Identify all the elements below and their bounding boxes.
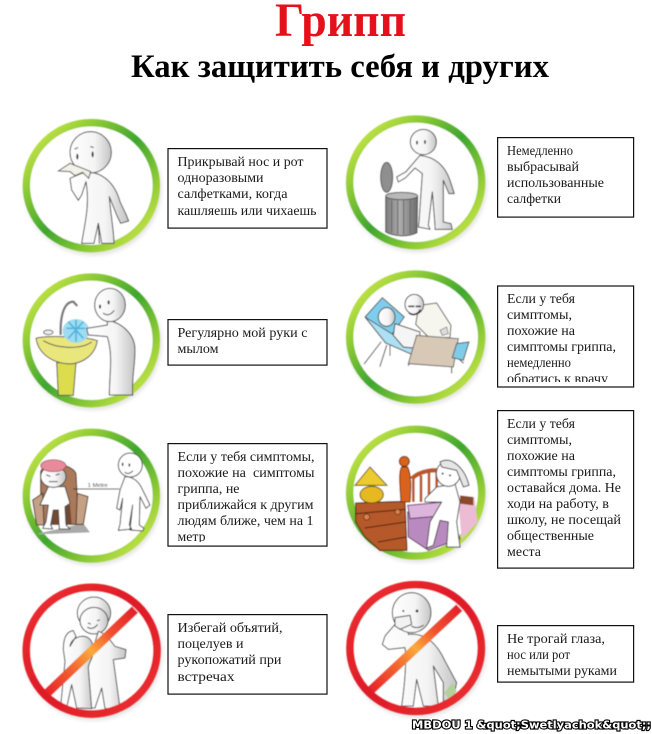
icon: sick person one metre away	[26, 432, 158, 562]
text box: throw away tissues: выбрасывай	[507, 160, 580, 175]
text box: stay at home: симптомы гриппа,	[507, 465, 616, 480]
text box: see a doctor: немедленно	[507, 356, 571, 371]
text box: see a doctor: симптомы гриппа,	[507, 340, 616, 355]
text box: keep distance: Если у тебя симптомы,	[178, 450, 314, 465]
text box: see a doctor: похожие на	[507, 324, 576, 339]
text box: avoid hugs	[168, 615, 327, 694]
text box: see a doctor: Если у тебя	[507, 292, 576, 307]
text box: throw away tissues: салфетки	[507, 192, 561, 207]
text box: keep distance: приближайся к другим	[178, 498, 314, 513]
text box: cover nose: Прикрывай нос и рот	[178, 155, 304, 170]
text box: do not touch face: нос или рот	[507, 648, 570, 663]
text box: keep distance: метр	[178, 530, 206, 545]
text box: cover nose	[168, 149, 327, 228]
text box: see a doctor: обратись к врачу	[507, 372, 608, 387]
icon: washing hands	[26, 277, 158, 406]
icon: prohibited hugging	[26, 587, 158, 717]
text box: throw away tissues	[498, 138, 634, 217]
text box: throw away tissues: Немедленно	[507, 144, 573, 159]
text box: stay at home: Если у тебя	[507, 417, 576, 432]
text box: wash hands: Регулярно мой руки с	[178, 326, 308, 341]
text box: cover nose: салфетками, когда	[178, 187, 288, 202]
text box: keep distance: гриппа, не	[178, 482, 240, 497]
text box: stay at home: ходи на работу, в	[507, 497, 609, 512]
text box: stay at home: школу, не посещай	[507, 513, 622, 528]
icon: prohibited touching face	[350, 585, 483, 714]
text box: do not touch face: немытыми руками	[507, 664, 617, 679]
text box: stay at home	[498, 411, 634, 568]
text box: wash hands: мылом	[178, 342, 219, 357]
subtitle: Как защитить себя и других	[131, 49, 549, 85]
text box: stay at home: общественные	[507, 529, 594, 544]
icon: sick person staying in bed at home	[350, 429, 483, 559]
icon: person covering nose with tissue	[26, 123, 158, 252]
text box: avoid hugs: встречах	[178, 670, 234, 685]
text box: do not touch face	[498, 626, 634, 682]
text box: stay at home: оставайся дома. Не	[507, 481, 621, 496]
text box: stay at home: места	[507, 545, 542, 560]
text box: cover nose: одноразовыми	[178, 171, 264, 186]
text box: cover nose: кашляешь или чихаешь	[178, 204, 316, 219]
text box: stay at home: симптомы,	[507, 433, 572, 448]
icon: sick person one metre away: 1 Metre	[88, 483, 108, 489]
text box: keep distance: людям ближе, чем на 1	[178, 514, 314, 529]
icon: doctor with patient in bed	[350, 274, 483, 403]
text box: see a doctor: симптомы,	[507, 308, 572, 323]
text box: stay at home: похожие на	[507, 449, 576, 464]
text box: see a doctor	[498, 286, 634, 387]
text box: throw away tissues: использованные	[507, 176, 604, 191]
text box: keep distance	[168, 444, 327, 546]
text box: do not touch face: Не трогай глаза,	[507, 632, 605, 647]
text box: avoid hugs: рукопожатий при	[178, 653, 282, 668]
text box: avoid hugs: поцелуев и	[178, 637, 244, 652]
icon: person throwing tissue in bin	[350, 119, 483, 248]
text box: keep distance: похожие на симптомы	[178, 466, 315, 481]
text box: avoid hugs: Избегай объятий,	[178, 621, 282, 636]
text box: wash hands	[168, 320, 327, 365]
watermark footer: MBDOU 1 &quot;Swetlyachok&quot;;	[412, 718, 651, 732]
